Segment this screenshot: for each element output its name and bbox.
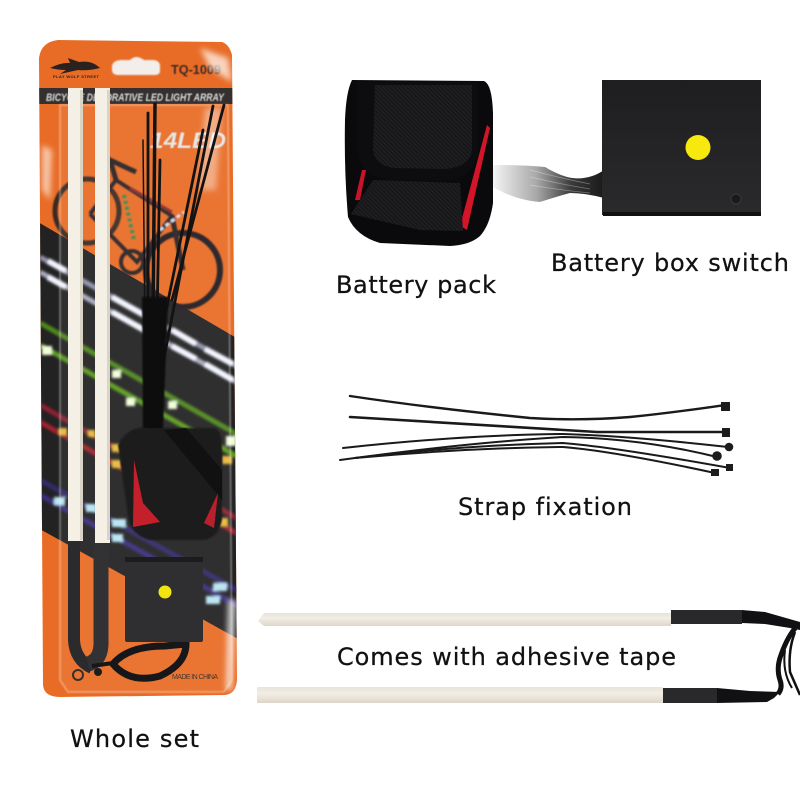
pouch flap	[358, 82, 478, 181]
hang hole	[112, 57, 160, 75]
package card background	[39, 40, 237, 697]
14LED label: 14LED	[150, 128, 226, 153]
dark diagonal band	[38, 222, 240, 640]
icon: LED strip top	[258, 610, 800, 630]
made in china label: MADE IN CHINA	[172, 674, 218, 681]
label: battery box switch: Battery box switch	[551, 249, 789, 277]
tie heads	[711, 402, 733, 476]
icon: battery box wires	[493, 165, 604, 202]
label: whole set: Whole set	[70, 725, 199, 753]
cable ties in package	[143, 104, 224, 430]
LED strips in package	[68, 88, 110, 543]
label: battery pack: Battery pack	[336, 271, 496, 299]
blister glare	[42, 48, 236, 690]
blister tray	[60, 105, 232, 692]
pouch red trim	[460, 125, 490, 230]
icon: battery box switch	[602, 80, 761, 216]
yellow dot	[686, 135, 710, 160]
small button	[731, 194, 741, 204]
brand logo: PLAY WOLF STREET	[53, 74, 100, 79]
model number: TQ-1009	[171, 62, 221, 77]
switch box in package	[125, 557, 203, 642]
tangled wires in package	[92, 644, 186, 678]
icon: battery pack pouch	[345, 80, 493, 246]
icon: strap cable ties	[340, 396, 733, 476]
battery pack in package	[118, 428, 222, 540]
cable bundle in package	[142, 297, 168, 430]
pouch lower pocket	[351, 180, 463, 231]
recycle mark	[73, 670, 83, 680]
bicycle graphic	[55, 160, 220, 307]
package title text: BICYCLE DECORATIVE LED LIGHT ARRAY	[46, 92, 225, 104]
label: comes with adhesive tape: Comes with adhesive tape	[337, 643, 676, 671]
label: strap fixation: Strap fixation	[458, 493, 632, 521]
top black title band	[38, 88, 240, 104]
icon: strip cable loop	[778, 625, 800, 695]
panel: whole set retail package	[38, 40, 240, 697]
light streaks	[40, 257, 240, 607]
strip black tails	[74, 538, 102, 676]
icon: LED strip bottom	[257, 687, 780, 703]
brand logo	[50, 58, 100, 79]
